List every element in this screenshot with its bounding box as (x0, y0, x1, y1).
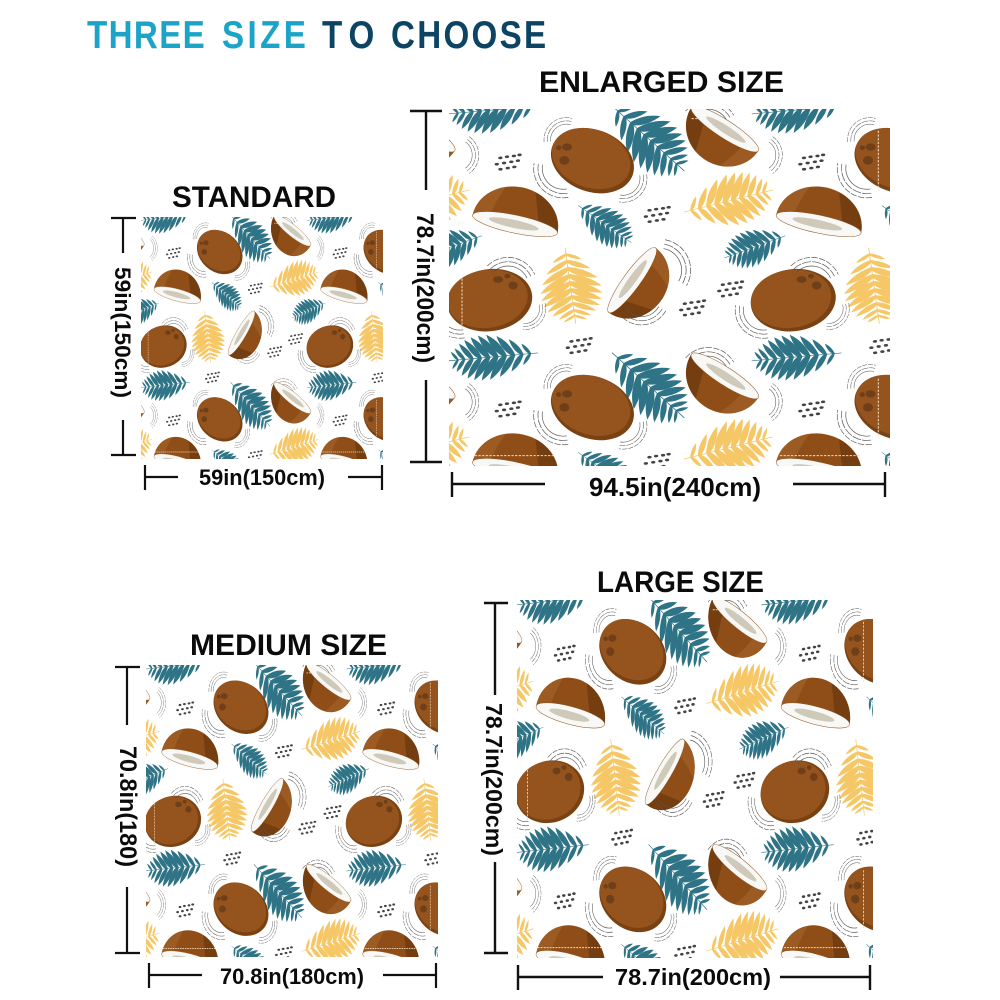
fabric pattern: enlarged (140, 0, 1000, 505)
width dimension: medium (149, 963, 436, 989)
width dimension: standard: 59in(150cm) (199, 465, 325, 490)
panel: enlarged size (140, 0, 1000, 505)
height dimension: enlarged: 78.7in(200cm) (411, 213, 438, 363)
fabric pattern: medium (0, 552, 574, 989)
fabric pattern: standard (0, 124, 496, 485)
width dimension: large: 78.7in(200cm) (615, 964, 771, 990)
panel: standard (0, 124, 496, 490)
heading: large size: LARGE SIZE (597, 566, 764, 599)
title: CHOOSE (391, 12, 548, 57)
title: SIZE (222, 12, 309, 57)
height dimension: large: 78.7in(200cm) (481, 703, 507, 856)
height dimension: enlarged (410, 111, 442, 462)
height dimension: medium (114, 667, 141, 953)
heading: enlarged size: ENLARGED SIZE (539, 66, 784, 99)
width dimension: enlarged: 94.5in(240cm) (589, 472, 761, 502)
panel: medium size (0, 552, 574, 989)
title (87, 12, 548, 57)
width dimension: enlarged (452, 472, 885, 502)
title: TO (322, 12, 381, 57)
title: THREE (87, 12, 206, 57)
heading: standard: STANDARD (172, 181, 336, 214)
height dimension: standard (110, 218, 136, 455)
width dimension: large (518, 964, 870, 990)
fabric pattern: large (267, 462, 1000, 997)
heading: medium size: MEDIUM SIZE (190, 629, 387, 662)
height dimension: medium: 70.8in(180) (114, 746, 141, 867)
panel: large size (267, 462, 1000, 997)
height dimension: large (481, 603, 508, 953)
height dimension: standard: 59in(150cm) (110, 267, 135, 398)
width dimension: standard (145, 465, 382, 490)
width dimension: medium: 70.8in(180cm) (220, 964, 364, 989)
